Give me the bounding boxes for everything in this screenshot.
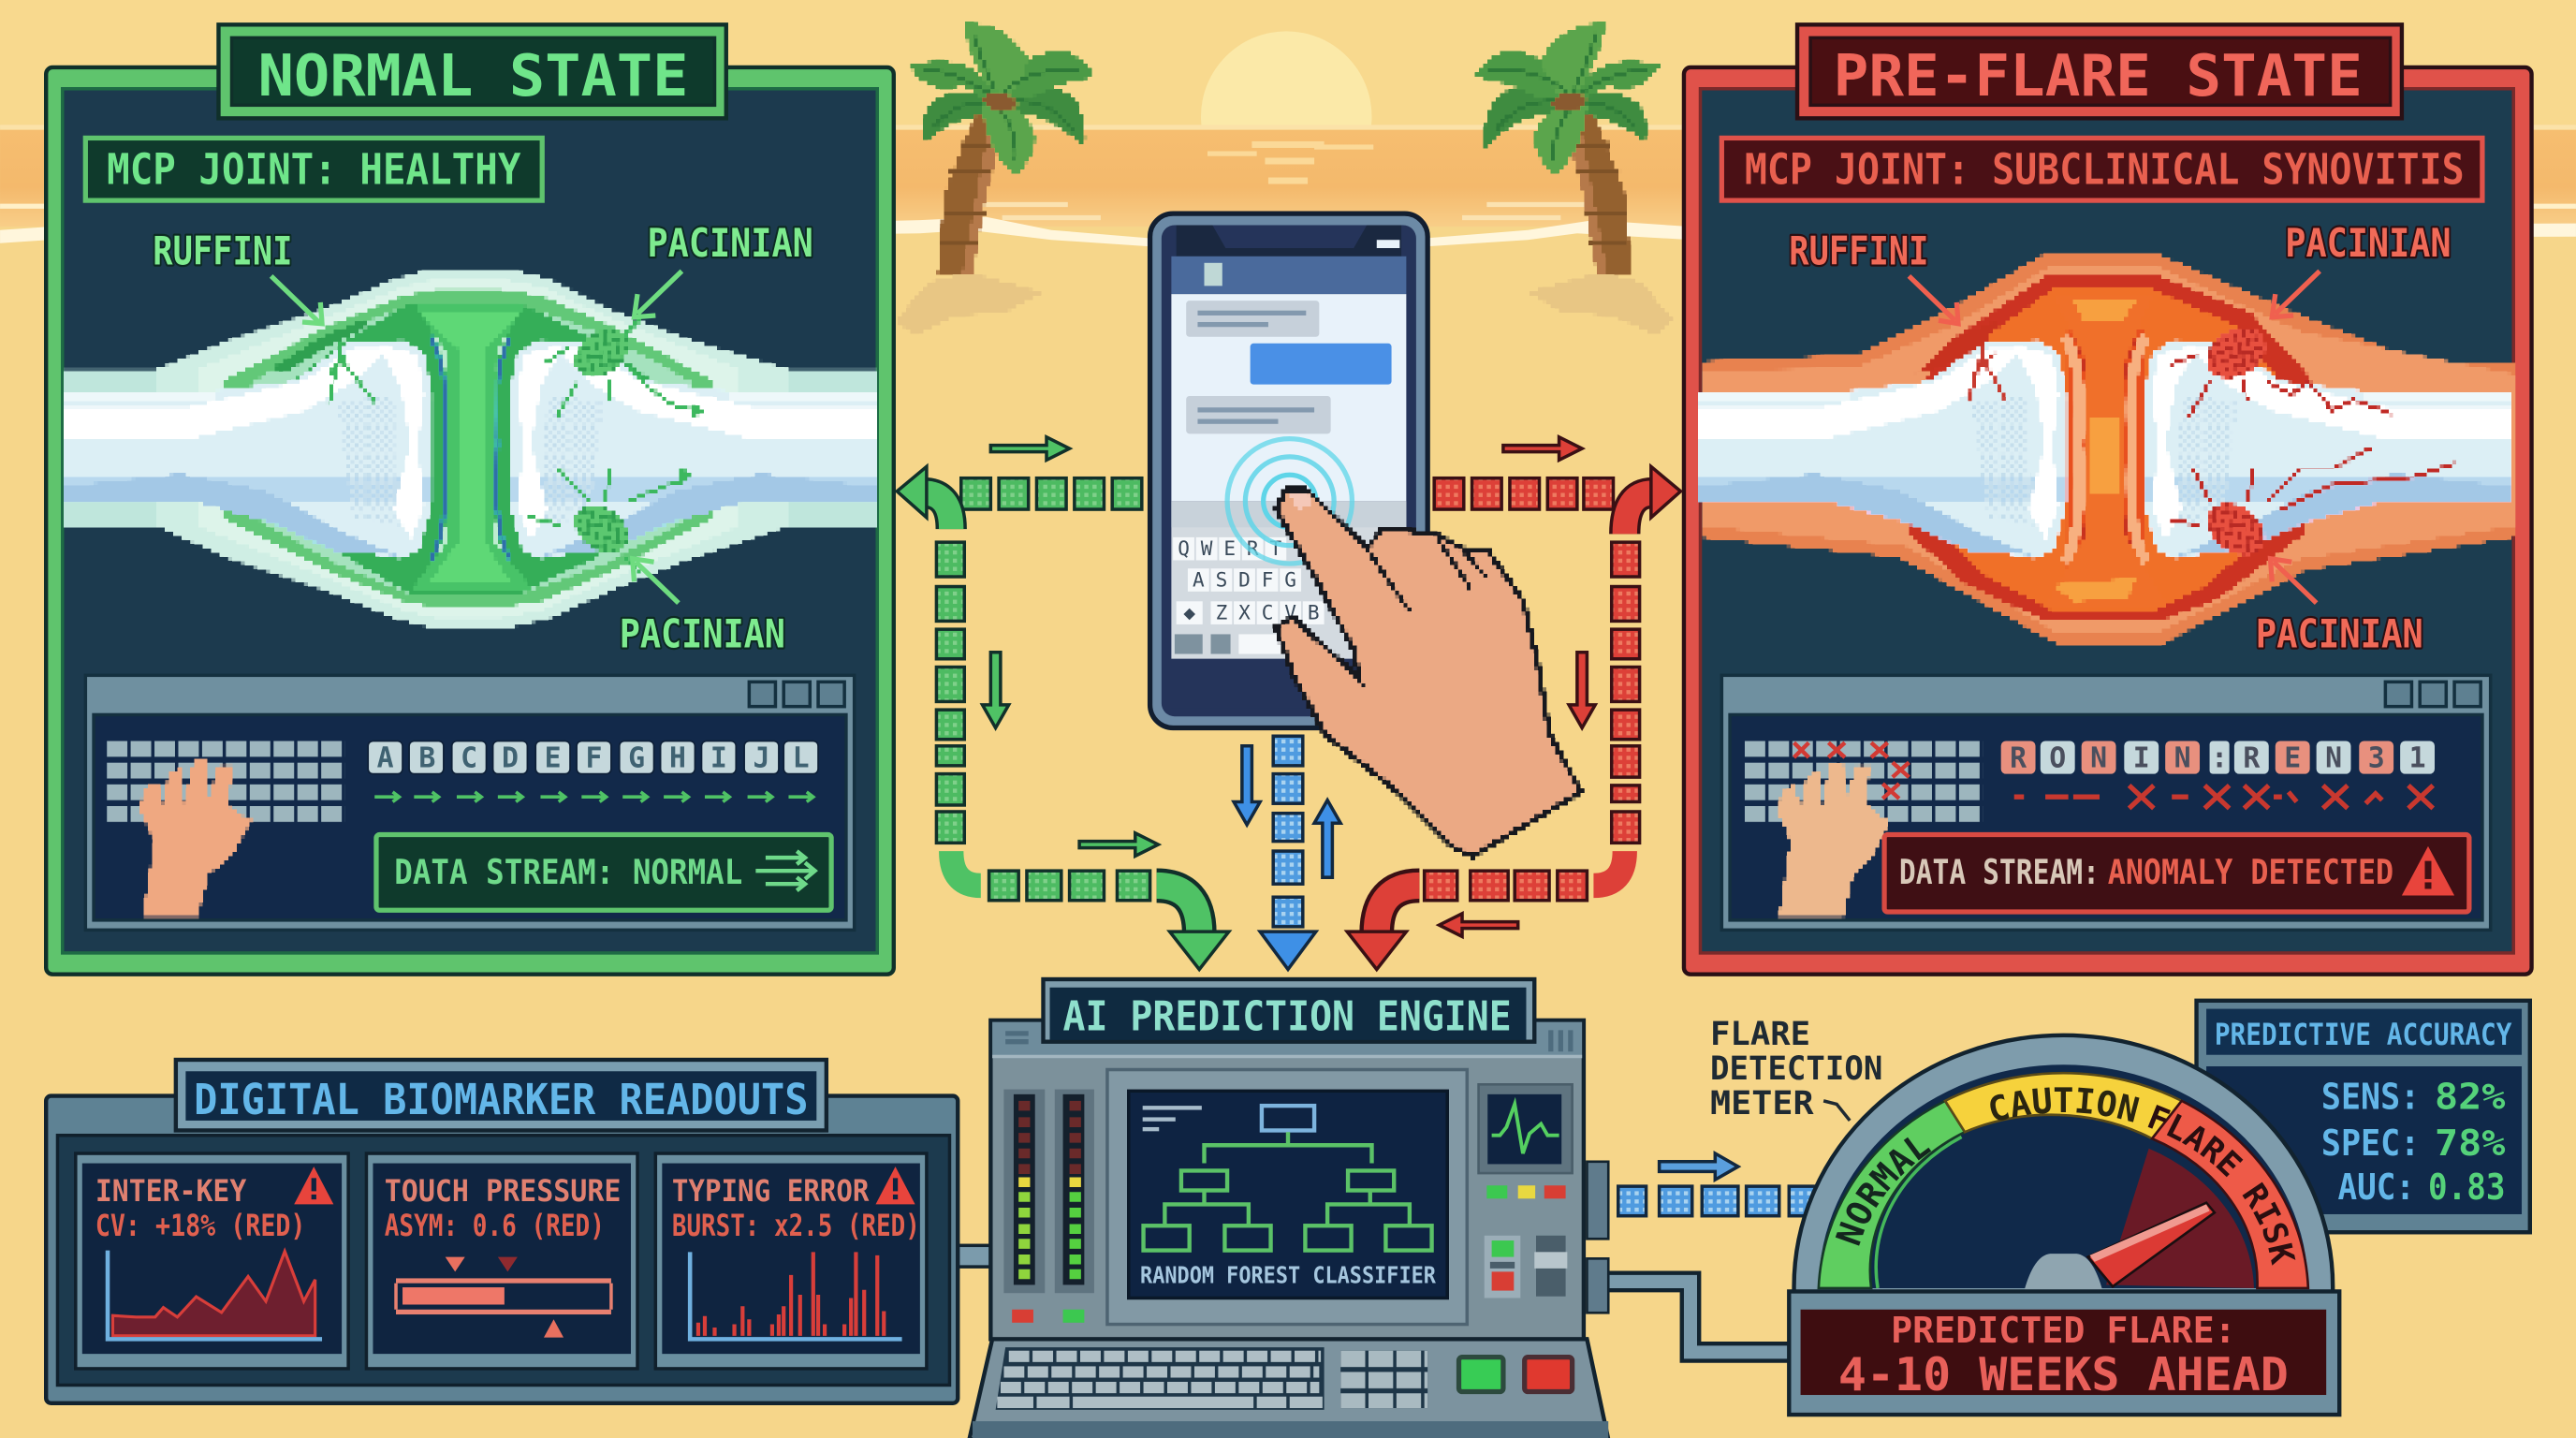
phone keyboard: T xyxy=(1270,536,1282,560)
stat: specificity: 78% xyxy=(2435,1123,2505,1165)
panel: pre-flare state xyxy=(1684,24,2532,975)
phone keyboard: E xyxy=(1223,536,1236,560)
heading: pre-flare state: PRE-FLARE STATE xyxy=(1834,43,2363,110)
wire: biomarkers to engine xyxy=(953,1245,996,1267)
status: anomaly detected xyxy=(1884,835,2469,912)
small arrow red right xyxy=(1503,437,1582,460)
heading: predictive accuracy: PREDICTIVE ACCURACY xyxy=(2215,1019,2511,1052)
icon: hand typing xyxy=(139,759,252,917)
letter keys: G xyxy=(628,742,645,775)
heading: digital biomarker readouts: DIGITAL BIOMARKER READOUTS xyxy=(194,1075,809,1124)
vent marks xyxy=(1005,1030,1571,1051)
letter keys with errors: N xyxy=(2174,742,2191,775)
mini keyboard with errors xyxy=(1745,741,1983,823)
connector: blue chain engine to meter xyxy=(1618,1153,1815,1216)
panel: AI prediction engine xyxy=(970,979,1608,1438)
gauge label: flare risk: FLARE RISK xyxy=(2147,1105,2295,1266)
small arrow red left xyxy=(1439,914,1518,936)
chat bubble incoming second xyxy=(1186,396,1331,433)
control lights and switches xyxy=(1485,1162,1608,1313)
phone keyboard: ◆ xyxy=(1183,601,1195,624)
vu meters xyxy=(1003,1090,1094,1323)
icon: hand typing red panel xyxy=(1778,762,1889,917)
gauge dial background xyxy=(1819,1064,2308,1288)
letter keys with errors xyxy=(2001,741,2435,775)
label: pacinian upper: PACINIAN xyxy=(648,220,813,266)
icon: window buttons xyxy=(749,682,844,707)
ruffini receptor inflamed xyxy=(1914,318,2001,374)
button: red xyxy=(1525,1357,1573,1392)
phone keyboard: D xyxy=(1238,568,1251,592)
stat: sensitivity xyxy=(2321,1077,2505,1119)
pacinian receptor upper inflamed xyxy=(2197,317,2275,389)
wire: engine to readout xyxy=(1602,1282,1791,1352)
label: ruffini red: RUFFINI xyxy=(1789,228,1928,274)
arrow: red corner xyxy=(1593,851,1625,886)
sublabel: MCP joint healthy: MCP JOINT: HEALTHY xyxy=(107,145,521,195)
small arrow red down xyxy=(1569,653,1595,727)
stat: AUC: AUC: xyxy=(2337,1167,2415,1209)
phone keyboard: C xyxy=(1262,601,1273,624)
label: pacinian upper red: PACINIAN xyxy=(2285,220,2452,266)
arrows: key stream xyxy=(374,792,813,801)
label: flare detection meter: DETECTION xyxy=(1710,1049,1882,1088)
connector: red chain from phone to flare panel xyxy=(1347,437,1680,969)
panel: predictive accuracy xyxy=(2197,1001,2530,1232)
mini keyboard xyxy=(107,741,345,823)
chat bubble incoming xyxy=(1186,301,1319,337)
icon: warning xyxy=(294,1167,333,1204)
phone keyboard: R xyxy=(1247,536,1259,560)
letter keys: D xyxy=(502,742,519,775)
label: flare detection meter: METER xyxy=(1710,1084,1815,1123)
waves xyxy=(0,217,2576,246)
connector: green chain from phone to normal panel xyxy=(897,437,1229,969)
arrows: receptor pointers red xyxy=(1909,271,2320,603)
label: pacinian lower red: PACINIAN xyxy=(2256,610,2423,656)
palm tree left xyxy=(897,23,1094,335)
sea band xyxy=(0,128,2576,227)
gauge label: normal: NORMAL xyxy=(1835,1137,1931,1246)
readout: predicted flare xyxy=(1789,1291,2339,1415)
letter keys: E xyxy=(545,742,562,775)
icon: warning xyxy=(875,1167,915,1204)
stat: specificity: SPEC: xyxy=(2321,1123,2420,1165)
arrow: blue down large xyxy=(1260,932,1316,969)
phone keyboard: G xyxy=(1284,568,1296,592)
phone keyboard: Z xyxy=(1216,601,1228,624)
chart: pressure bar xyxy=(394,1257,613,1338)
touch ripple xyxy=(1227,439,1352,564)
typing window normal xyxy=(85,675,855,930)
letter keys with errors: N xyxy=(2325,742,2342,775)
phone keyboard xyxy=(1171,501,1406,708)
keyboard console xyxy=(996,1347,1427,1410)
mini ECG monitor xyxy=(1479,1084,1573,1173)
stat: AUC: 0.83 xyxy=(2428,1167,2505,1209)
letter keys with errors: E xyxy=(2284,742,2301,775)
letter keys: H xyxy=(669,742,686,775)
small arrow blue right xyxy=(1660,1153,1738,1180)
letter keys xyxy=(368,741,818,775)
gauge label paths xyxy=(1853,1112,2274,1288)
label: pacinian lower: PACINIAN xyxy=(620,610,785,656)
arrow: green corner xyxy=(951,851,981,886)
phone keyboard: X xyxy=(1238,601,1251,624)
gauge: flare detection meter xyxy=(1787,1034,2342,1417)
arrow: into flare panel xyxy=(1625,466,1680,534)
panel: normal state xyxy=(46,24,894,975)
letter keys with errors: R xyxy=(2010,742,2027,775)
button: green xyxy=(1459,1357,1503,1392)
small arrow right upper xyxy=(990,437,1070,460)
card: touch pressure: TOUCH PRESSURE xyxy=(385,1175,621,1209)
gauge zone: flare risk xyxy=(2152,1101,2308,1288)
stat: specificity xyxy=(2321,1123,2505,1165)
wire: engine to readout highlight xyxy=(1602,1282,1791,1352)
small arrow blue up xyxy=(1314,800,1340,877)
icon: hand touching phone xyxy=(1277,490,1580,856)
sublabel: MCP joint subclinical synovitis: MCP JOINT: SUBCLINICAL SYNOVITIS xyxy=(1745,145,2465,195)
gauge inner rim xyxy=(1876,1137,1962,1288)
gauge zone: normal xyxy=(1819,1101,1965,1288)
phone keyboard: W xyxy=(1201,536,1213,560)
joint diagram inflamed xyxy=(1699,255,2513,646)
heading: AI prediction engine: AI PREDICTION ENGINE xyxy=(1063,992,1512,1040)
small arrow right lower xyxy=(1079,833,1158,856)
gauge risk sector xyxy=(2106,1149,2254,1288)
letter keys with errors: I xyxy=(2133,742,2150,775)
letter keys with errors: 1 xyxy=(2409,742,2426,775)
status: anomaly detected: ANOMALY DETECTED xyxy=(2108,852,2393,892)
phone keyboard: A xyxy=(1193,568,1205,592)
chart: error bursts xyxy=(690,1252,902,1339)
letter keys: J xyxy=(754,742,769,775)
letter keys with errors: N xyxy=(2090,742,2107,775)
label: ruffini: RUFFINI xyxy=(153,228,292,274)
ruffini receptor xyxy=(271,317,370,374)
letter keys: F xyxy=(586,742,602,775)
card: typing error: BURST: x2.5 (RED) xyxy=(672,1210,920,1243)
phone keyboard: S xyxy=(1216,568,1227,592)
arrows: receptor pointers xyxy=(271,271,681,603)
card: typing error: TYPING ERROR xyxy=(672,1175,870,1209)
decision tree xyxy=(1144,1106,1432,1251)
stat: sensitivity: 82% xyxy=(2435,1077,2505,1119)
label: flare detection meter: FLARE xyxy=(1710,1015,1810,1053)
arrow: red down into engine xyxy=(1347,886,1419,969)
letter keys: L xyxy=(793,742,810,775)
card: touch pressure: ASYM: 0.6 (RED) xyxy=(385,1210,605,1243)
letter keys with errors: O xyxy=(2049,742,2066,775)
status: data stream normal xyxy=(376,835,831,910)
letter keys with errors: R xyxy=(2243,742,2260,775)
icon: window buttons xyxy=(2385,682,2481,707)
card: typing error xyxy=(655,1153,927,1369)
sun xyxy=(1201,31,1372,202)
letter keys: A xyxy=(377,742,394,775)
stat: AUC xyxy=(2337,1167,2505,1209)
chat bubble outgoing xyxy=(1251,344,1392,385)
icon: smartphone xyxy=(1150,213,1427,727)
stat: sensitivity: SENS: xyxy=(2321,1077,2420,1119)
card: inter-key: CV: +18% (RED) xyxy=(95,1210,305,1243)
letter keys: I xyxy=(710,742,727,775)
gauge label: caution: CAUTION xyxy=(1990,1087,2140,1123)
letter keys with errors: : xyxy=(2211,742,2228,775)
pacinian receptor upper xyxy=(564,319,637,388)
pacinian receptor lower xyxy=(564,494,637,564)
gauge needle xyxy=(2088,1203,2215,1286)
connector: blue chain phone to engine xyxy=(1234,736,1340,969)
small arrow blue down xyxy=(1234,746,1260,825)
chart: inter-key area xyxy=(108,1251,322,1339)
typing window anomaly xyxy=(1721,675,2491,930)
phone keyboard: V xyxy=(1284,601,1296,624)
phone keyboard: Q xyxy=(1178,536,1190,560)
card: inter-key xyxy=(76,1153,348,1369)
heading: normal state xyxy=(218,24,726,118)
palm tree right xyxy=(1475,23,1673,335)
arrow: into normal panel xyxy=(897,466,951,529)
icon: warning triangle xyxy=(2402,846,2454,895)
gauge hub xyxy=(2024,1254,2102,1291)
letter keys with errors: 3 xyxy=(2368,742,2385,775)
letter keys: B xyxy=(418,742,435,775)
heading: digital biomarker readouts xyxy=(176,1060,827,1130)
gauge zone: caution xyxy=(1945,1073,2182,1138)
readout: predicted flare: 4-10 WEEKS AHEAD xyxy=(1838,1347,2289,1401)
phone keyboard: B xyxy=(1308,601,1320,624)
label: flare detection meter xyxy=(1710,1015,1882,1123)
marks: disrupted stream xyxy=(2014,785,2433,808)
panel: digital biomarker readouts xyxy=(46,1060,958,1403)
readout: predicted flare: PREDICTED FLARE: xyxy=(1891,1310,2236,1352)
card: touch pressure xyxy=(366,1153,637,1369)
pacinian receptor lower inflamed xyxy=(2197,492,2275,565)
label: random forest classifier: RANDOM FOREST CLASSIFIER xyxy=(1140,1262,1436,1289)
heading: pre-flare state xyxy=(1797,24,2402,118)
status: anomaly detected: DATA STREAM: xyxy=(1899,852,2100,892)
joint diagram healthy xyxy=(65,270,875,627)
card: inter-key: INTER-KEY xyxy=(95,1175,246,1209)
letter keys: C xyxy=(461,742,477,775)
phone keyboard: F xyxy=(1262,568,1273,592)
heading: normal state: NORMAL STATE xyxy=(258,43,688,110)
monitor xyxy=(1107,1070,1467,1325)
arrow: green down into engine xyxy=(1157,886,1229,969)
small arrow down xyxy=(983,653,1009,727)
status: data stream normal: DATA STREAM: NORMAL xyxy=(394,852,742,892)
icon: stream arrows xyxy=(755,851,815,890)
